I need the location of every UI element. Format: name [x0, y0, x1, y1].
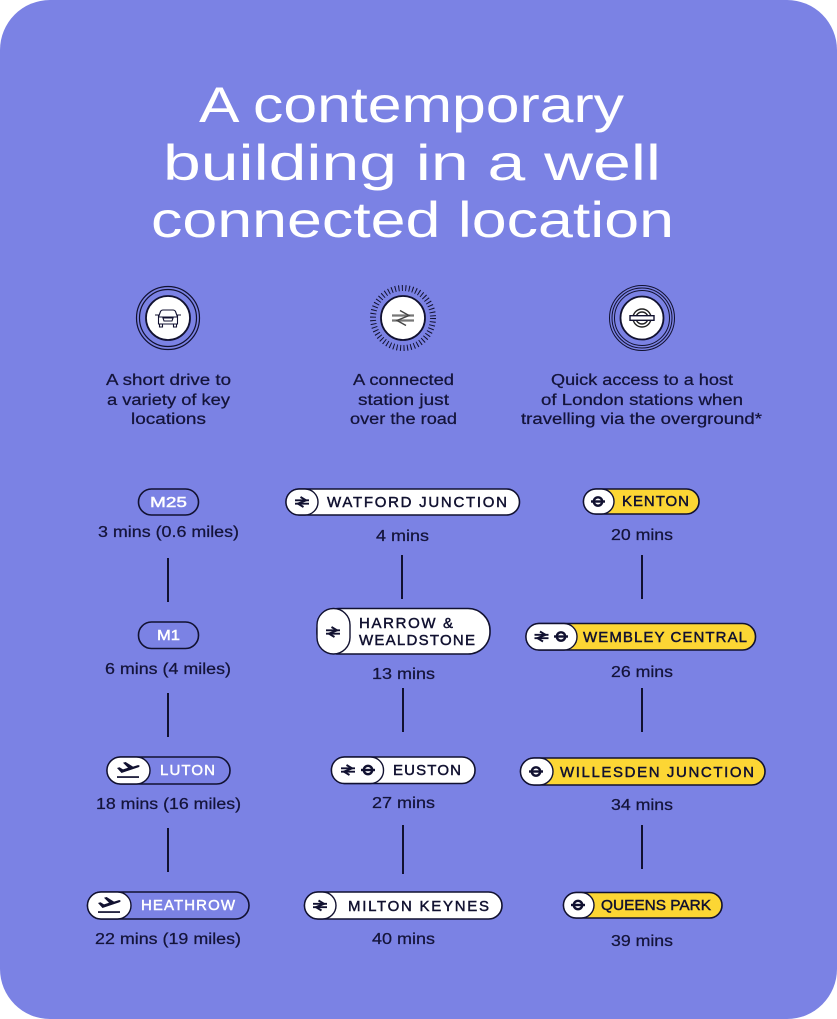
pill: Harrow and Wealdstone — [317, 608, 490, 654]
caption: overground: of London stations when — [541, 392, 743, 409]
time: Watford Junction: 4 mins — [376, 528, 429, 545]
caption: overground: travelling via the overground* — [521, 411, 762, 428]
caption: overground: Quick access to a host — [551, 372, 734, 389]
time: M25: 3 mins (0.6 miles) — [98, 524, 239, 541]
caption: drive: locations — [131, 411, 206, 428]
time: Willesden Junction: 34 mins — [611, 797, 673, 814]
caption: drive: a variety of key — [107, 392, 230, 409]
time: Luton: 18 mins (16 miles) — [96, 796, 241, 813]
pill: M1 — [138, 622, 198, 648]
pill: Luton — [107, 757, 230, 784]
pill: Luton: LUTON — [160, 762, 215, 779]
caption: drive — [106, 372, 231, 428]
pill: Harrow and Wealdstone: HARROW & — [359, 615, 453, 632]
pill: Heathrow: HEATHROW — [141, 897, 236, 914]
title: building in a well — [163, 135, 661, 191]
pill: Heathrow — [88, 892, 249, 919]
icon: underground roundel — [610, 286, 674, 350]
pill: Queens Park — [564, 892, 722, 918]
pill: M25: M25 — [150, 494, 187, 511]
pill: Watford Junction: WATFORD JUNCTION — [327, 494, 507, 511]
pill: M1: M1 — [157, 627, 180, 644]
icon: car — [136, 286, 200, 350]
pill: Milton Keynes: MILTON KEYNES — [348, 898, 489, 915]
time: Euston: 27 mins — [372, 795, 435, 812]
time: Kenton: 20 mins — [611, 527, 673, 544]
pill: Harrow and Wealdstone: WEALDSTONE — [359, 632, 475, 649]
caption: station: station just — [358, 392, 450, 409]
pill: Watford Junction — [286, 489, 520, 515]
pill: Willesden Junction: WILLESDEN JUNCTION — [560, 764, 754, 781]
pill: Wembley Central — [526, 624, 756, 650]
pill: Willesden Junction — [520, 758, 765, 785]
time: Heathrow: 22 mins (19 miles) — [95, 931, 241, 948]
pill: Queens Park: QUEENS PARK — [601, 897, 711, 914]
caption: station: A connected — [353, 372, 454, 389]
time: Milton Keynes: 40 mins — [372, 931, 435, 948]
pill: M25 — [138, 489, 198, 515]
pill: Euston — [332, 757, 475, 784]
column: station — [286, 288, 520, 948]
pill: Kenton: KENTON — [622, 493, 689, 510]
time: Queens Park: 39 mins — [611, 933, 673, 950]
pill: Milton Keynes — [304, 892, 502, 919]
time: Harrow: 13 mins — [372, 666, 435, 683]
pill: Euston: EUSTON — [393, 762, 461, 779]
title: connected location — [151, 192, 674, 248]
caption: overground — [521, 372, 762, 428]
icon: rail — [373, 288, 433, 348]
column: overground — [520, 286, 765, 950]
column: drive — [88, 286, 249, 948]
time: Wembley Central: 26 mins — [611, 664, 673, 681]
caption: station: over the road — [350, 411, 457, 428]
title — [151, 77, 674, 248]
caption: drive: A short drive to — [106, 372, 231, 389]
pill: Wembley Central: WEMBLEY CENTRAL — [583, 629, 747, 646]
title: A contemporary — [199, 77, 624, 133]
caption: station — [350, 372, 457, 428]
pill: Kenton — [584, 489, 699, 514]
time: M1: 6 mins (4 miles) — [105, 661, 231, 678]
